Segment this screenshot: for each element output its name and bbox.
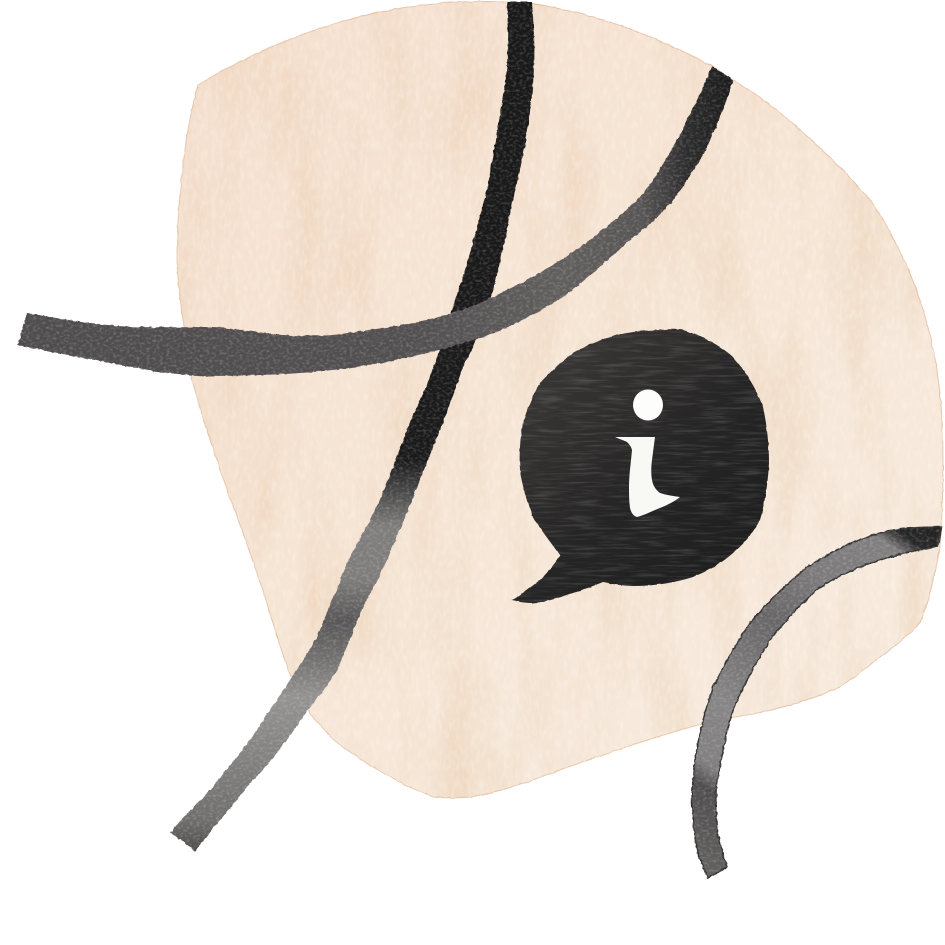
background blob: beige watercolor shape: [177, 2, 943, 798]
dot of i: [633, 390, 663, 420]
icon: info speech bubble: [512, 329, 769, 603]
stroke: long horizontal brush curve: [18, 66, 733, 376]
stem of i: [615, 437, 680, 517]
bubble: [512, 329, 769, 603]
stroke: long vertical brush line: [170, 2, 534, 851]
stroke: lower right arc: [692, 527, 941, 878]
